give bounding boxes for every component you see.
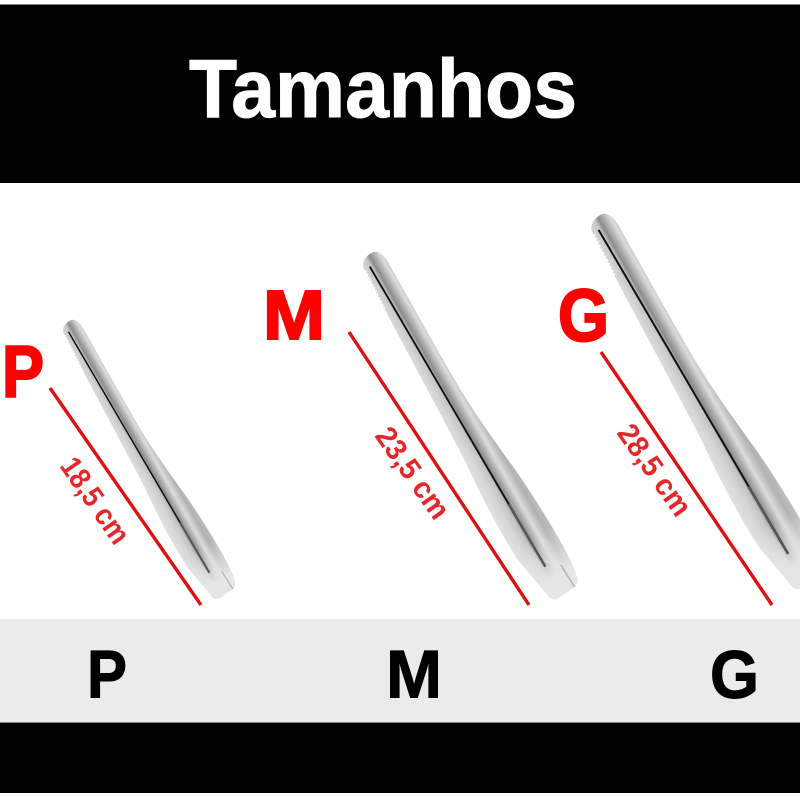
size M length: 23,5 cm — [368, 421, 456, 526]
size P caption: P — [87, 636, 127, 712]
size M caption: M — [386, 636, 442, 712]
size P length: 18,5 cm — [53, 451, 136, 551]
footer band — [0, 722, 800, 793]
size G length: 28,5 cm — [610, 418, 698, 523]
size G tongs — [578, 203, 800, 597]
title: Tamanhos — [189, 42, 577, 135]
size G label in red: G — [558, 274, 609, 357]
size M label in red: M — [263, 276, 325, 354]
size M measuring line — [349, 332, 529, 605]
size P measuring line — [50, 388, 201, 605]
size M tongs — [350, 242, 584, 606]
header band — [0, 4, 800, 183]
size P tongs — [53, 312, 240, 605]
grey size bar — [0, 619, 800, 722]
size G measuring line — [601, 352, 772, 605]
size P label in red: P — [2, 332, 44, 413]
size G caption: G — [710, 637, 759, 713]
